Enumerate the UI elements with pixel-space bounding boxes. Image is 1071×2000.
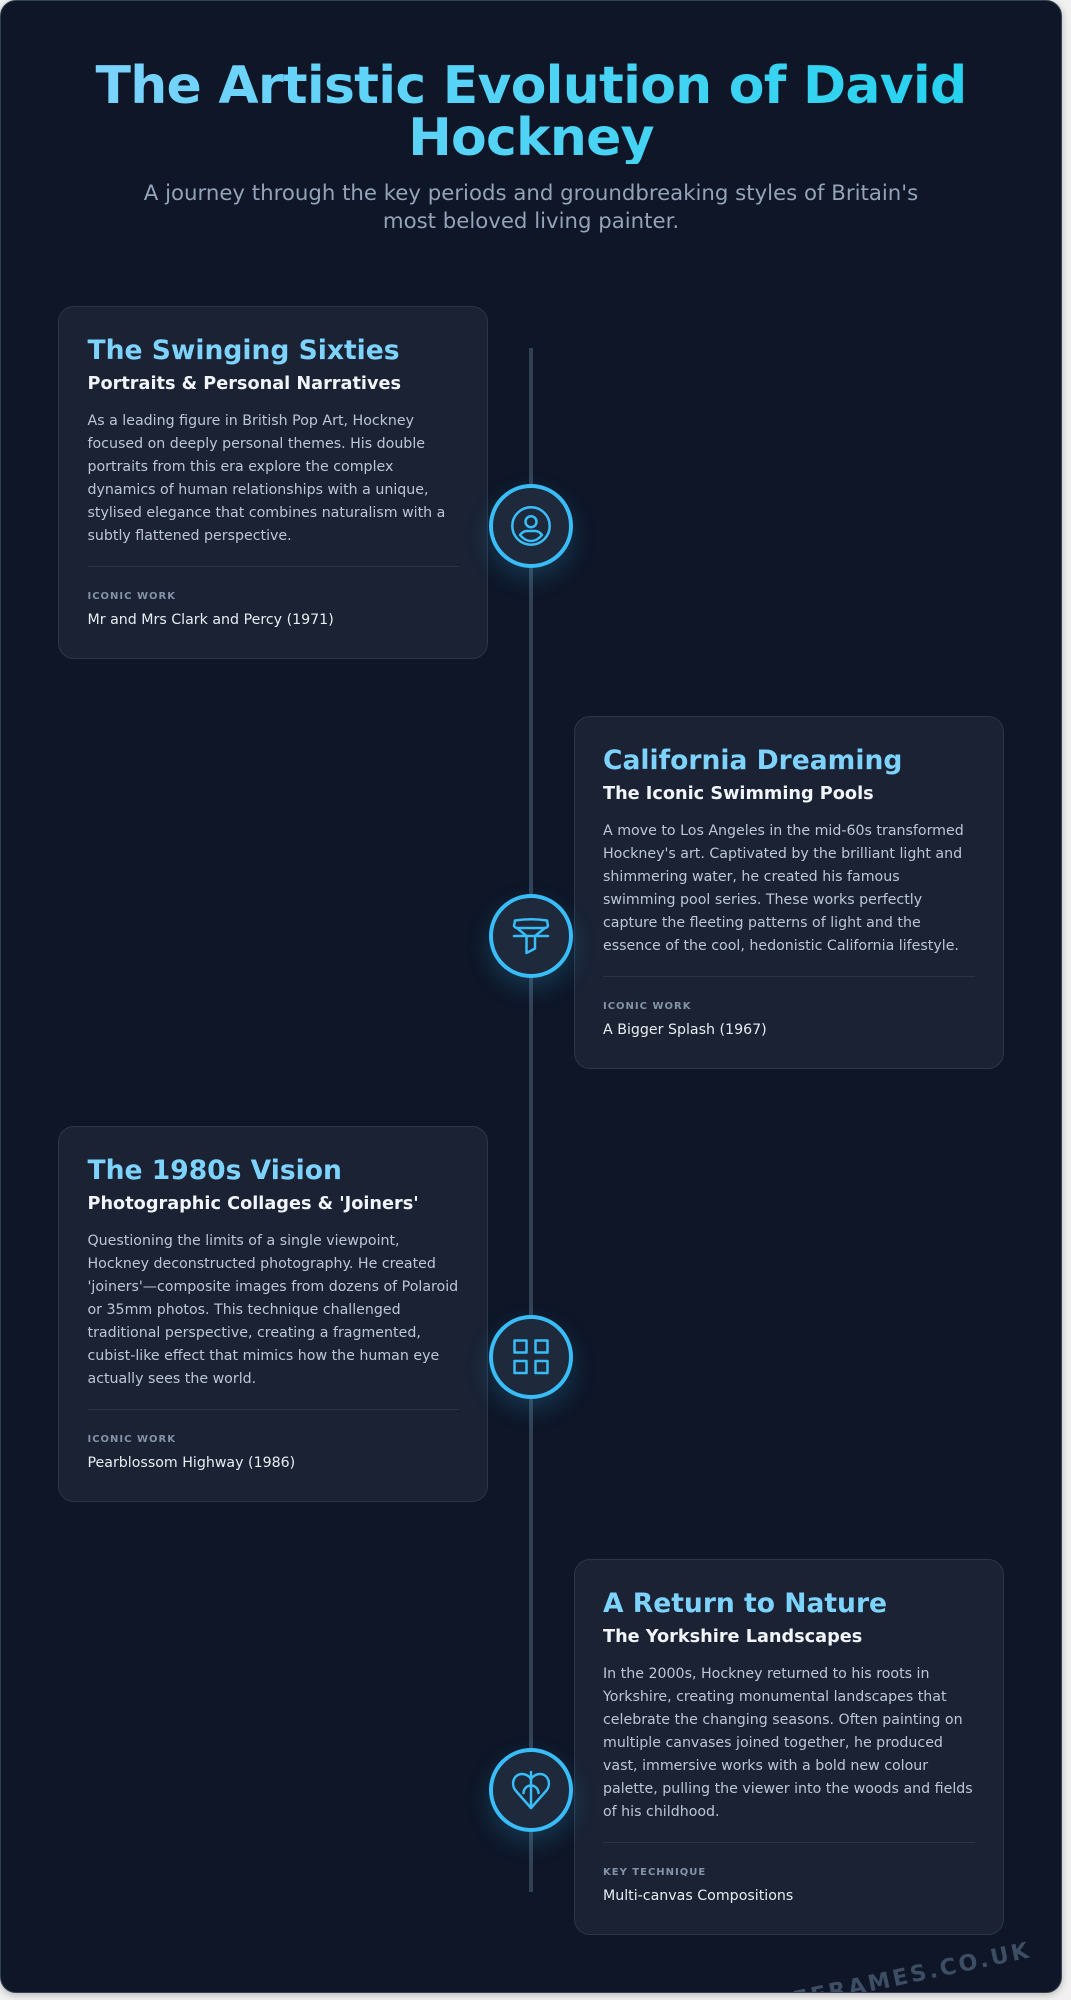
icon: person portrait — [489, 484, 573, 568]
body text: celebrate the changing seasons. Often painting on — [603, 1712, 963, 1728]
body text: Hockney deconstructed photography. He created — [88, 1256, 436, 1272]
subheading: Photographic Collages & 'Joiners' — [88, 1194, 419, 1214]
subheading: The Iconic Swimming Pools — [603, 784, 874, 804]
panel: A Return to Nature — [574, 1559, 1004, 1935]
icon: pool funnel — [489, 894, 573, 978]
subtitle: most beloved living painter. — [383, 209, 679, 234]
body text: As a leading figure in British Pop Art, Hockney — [88, 412, 414, 428]
title: Hockney — [408, 108, 654, 168]
body text: capture the fleeting patterns of light and the — [603, 914, 921, 930]
title: The Artistic Evolution of David — [96, 56, 966, 116]
heading: The 1980s Vision — [88, 1155, 342, 1186]
body text: shimmering water, he created his famous — [603, 868, 900, 884]
body text: Hockney's art. Captivated by the brilliant light and — [603, 846, 962, 862]
body text: actually sees the world. — [88, 1370, 256, 1386]
icon: leaf heart — [489, 1748, 573, 1832]
body text: A move to Los Angeles in the mid-60s transformed — [603, 822, 964, 838]
panel: The Swinging Sixties — [58, 306, 488, 659]
body text: swimming pool series. These works perfectly — [603, 892, 922, 908]
heading: California Dreaming — [603, 745, 902, 776]
subheading: Portraits & Personal Narratives — [88, 374, 401, 394]
body text: of his childhood. — [603, 1804, 720, 1820]
body text: subtly flattened perspective. — [88, 528, 292, 544]
body text: In the 2000s, Hockney returned to his roots in — [603, 1666, 929, 1682]
body text: portraits from this era explore the complex — [88, 458, 393, 474]
body text: dynamics of human relationships with a unique, — [88, 482, 429, 498]
body text — [603, 822, 964, 954]
subtitle: A journey through the key periods and groundbreaking styles of Britain's — [144, 181, 918, 206]
label: ICONIC WORK — [603, 1000, 691, 1012]
body text — [88, 412, 445, 544]
timeline line — [529, 348, 533, 1892]
body text: Yorkshire, creating monumental landscapes that — [603, 1688, 947, 1704]
body text — [88, 1232, 458, 1386]
title — [71, 60, 991, 164]
label: KEY TECHNIQUE — [603, 1866, 706, 1878]
panel: The 1980s Vision — [58, 1126, 488, 1502]
body text: or 35mm photos. This technique challenged — [88, 1302, 401, 1318]
iconic work: Mr and Mrs Clark and Percy (1971) — [88, 612, 334, 628]
key technique: Multi-canvas Compositions — [603, 1888, 793, 1904]
body text: focused on deeply personal themes. His double — [88, 436, 425, 452]
body text: stylised elegance that combines naturalism with a — [88, 504, 445, 520]
body text: palette, pulling the viewer into the woods and fields — [603, 1780, 973, 1796]
body text: essence of the cool, hedonistic California lifestyle. — [603, 938, 959, 954]
body text: vast, immersive works with a bold new colour — [603, 1758, 928, 1774]
label: ICONIC WORK — [88, 590, 176, 602]
subtitle — [144, 181, 918, 234]
iconic work: Pearblossom Highway (1986) — [88, 1455, 295, 1471]
body text: Questioning the limits of a single viewpoint, — [88, 1232, 400, 1248]
body text — [603, 1666, 973, 1820]
heading: A Return to Nature — [603, 1588, 887, 1619]
body text: multiple canvases joined together, he produced — [603, 1734, 943, 1750]
body text: cubist-like effect that mimics how the human eye — [88, 1348, 439, 1364]
heading: The Swinging Sixties — [88, 335, 400, 366]
body text: 'joiners'—composite images from dozens of Polaroid — [88, 1278, 458, 1294]
icon: collage grid — [489, 1315, 573, 1399]
subheading: The Yorkshire Landscapes — [603, 1627, 862, 1647]
body text: traditional perspective, creating a fragmented, — [88, 1324, 421, 1340]
label: ICONIC WORK — [88, 1434, 176, 1444]
iconic work: A Bigger Splash (1967) — [603, 1022, 767, 1038]
panel: California Dreaming — [574, 716, 1004, 1069]
